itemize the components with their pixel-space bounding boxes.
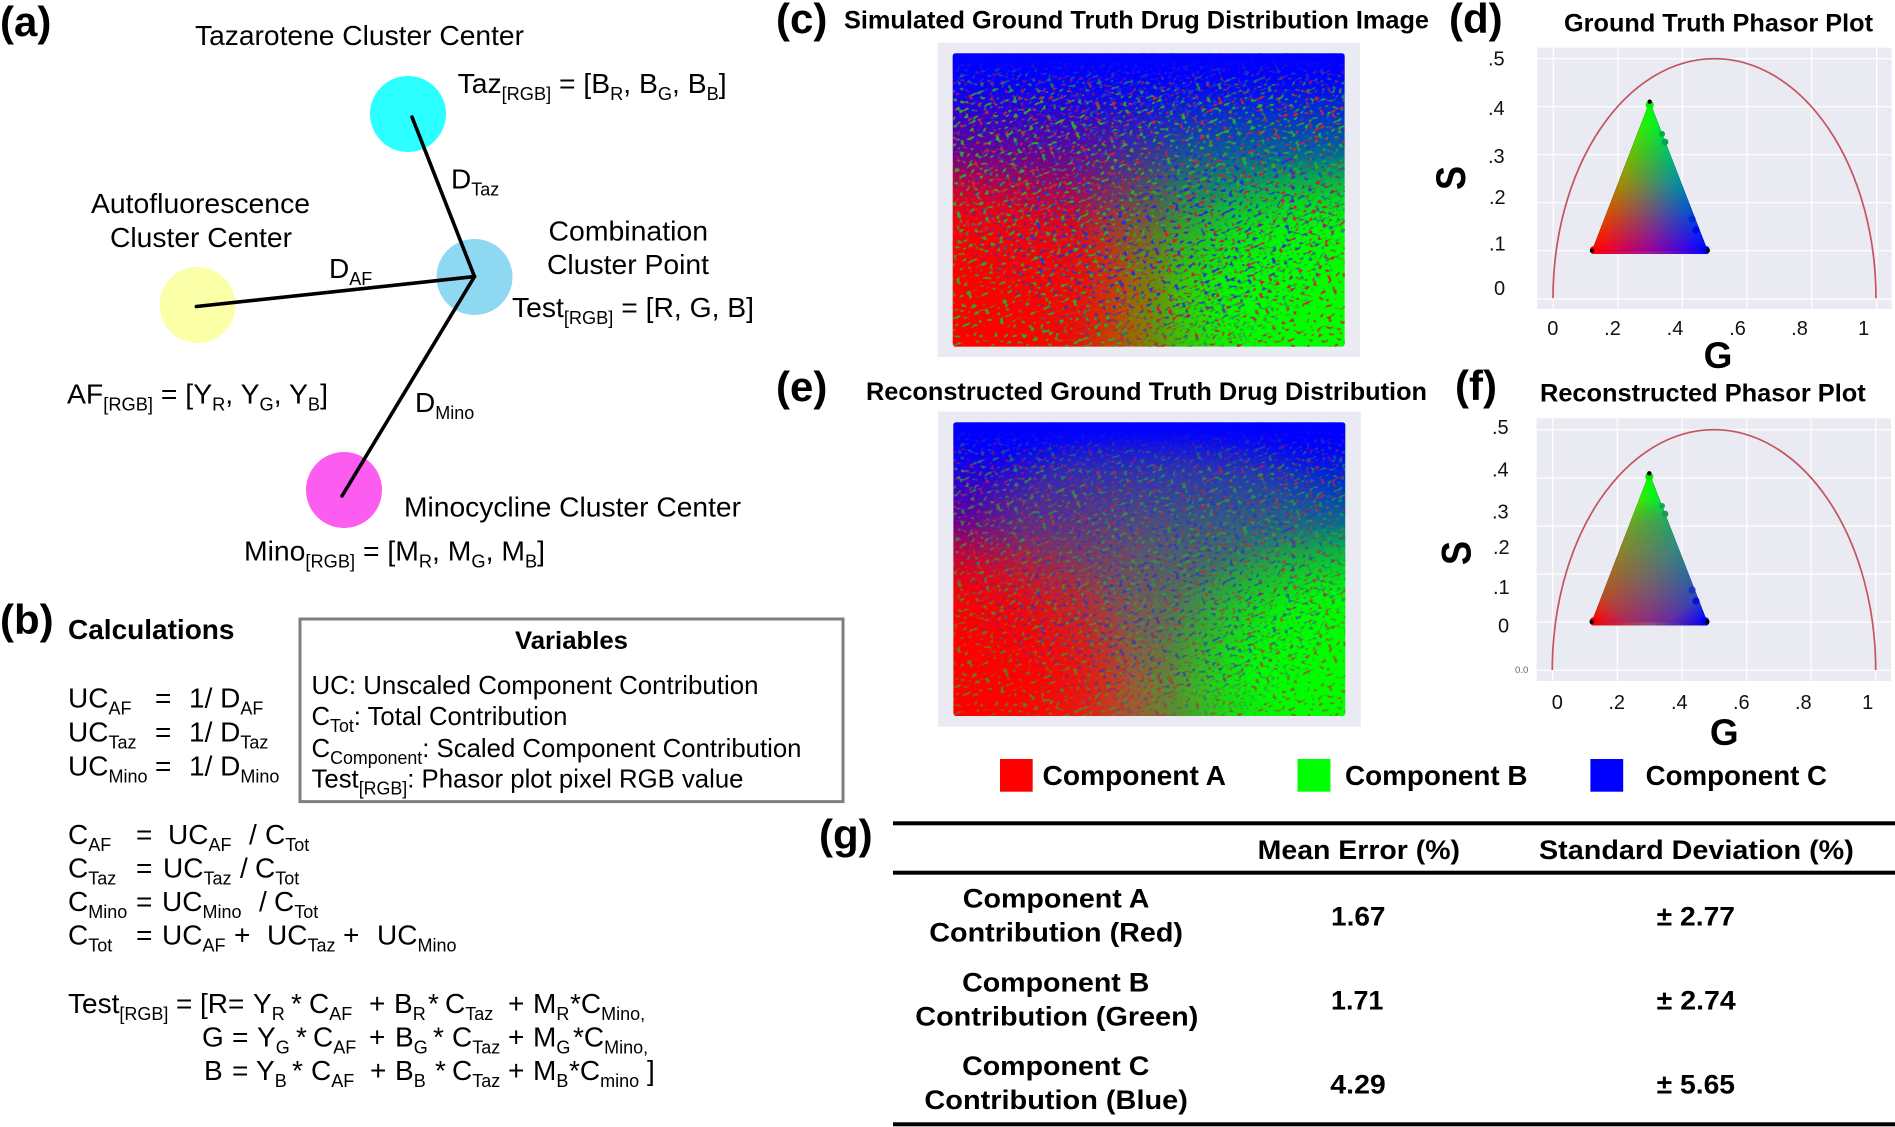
formulas: scaled contributions: UC xyxy=(162,886,202,917)
x axis ticks: .8 xyxy=(1791,318,1808,340)
formulas: scaled contributions: Taz xyxy=(203,869,231,889)
box: variables legend: C xyxy=(312,701,330,731)
label: D Mino: Mino xyxy=(435,403,474,423)
box: variables legend: : Scaled Component Contribution xyxy=(422,733,802,763)
formulas: test pixel RGB: B xyxy=(395,1022,414,1052)
y axis ticks: .1 xyxy=(1493,577,1510,599)
formulas: unscaled contributions: Mino xyxy=(108,767,147,787)
y axis title: S xyxy=(1432,541,1480,565)
y axis ticks: .5 xyxy=(1488,49,1505,71)
formulas: test pixel RGB: *C xyxy=(570,988,601,1019)
box: variables legend: Test xyxy=(312,764,359,794)
formulas: unscaled contributions: = xyxy=(155,682,171,714)
formulas: test pixel RGB: B xyxy=(394,988,413,1019)
box: variables legend: : Total Contribution xyxy=(354,701,568,731)
formula: AF RGB: R xyxy=(212,394,225,414)
chart background xyxy=(938,43,1360,357)
formulas: scaled contributions: AF xyxy=(208,835,231,855)
legend label B: Component B xyxy=(1345,760,1528,791)
formula: Mino RGB: Mino xyxy=(244,536,305,566)
formula: AF RGB: G xyxy=(260,394,274,414)
x axis ticks: .6 xyxy=(1729,318,1746,340)
formulas: test pixel RGB: B xyxy=(556,1071,568,1091)
distance lines xyxy=(196,117,474,496)
formula: Mino RGB: = [M xyxy=(355,536,419,566)
formulas: test pixel RGB: + xyxy=(508,1022,524,1052)
formulas: unscaled contributions: Mino xyxy=(240,767,279,787)
formulas: test pixel RGB: * xyxy=(292,1055,303,1086)
formulas: scaled contributions: Mino xyxy=(202,902,241,922)
formulas: scaled contributions: Mino xyxy=(417,936,456,956)
formulas: test pixel RGB: = xyxy=(232,1022,248,1052)
formulas: scaled contributions: / xyxy=(249,819,257,850)
formulas: test pixel RGB: + xyxy=(370,1055,386,1086)
y axis ticks: .2 xyxy=(1493,537,1510,559)
formulas: test pixel RGB: AF xyxy=(333,1038,356,1058)
table row: component A: Contribution (Red) xyxy=(929,918,1183,948)
y axis title: S xyxy=(1427,166,1474,190)
x axis ticks: .6 xyxy=(1733,692,1750,714)
chart background xyxy=(938,412,1361,727)
formulas: scaled contributions: / xyxy=(240,853,248,884)
table row: component C xyxy=(924,1051,1735,1115)
formulas: test pixel RGB: Taz xyxy=(465,1004,493,1024)
label: D Taz: Taz xyxy=(471,180,499,200)
formula: AF RGB: AF xyxy=(67,378,103,410)
formulas: test pixel RGB: [R= xyxy=(200,988,244,1019)
formula: Test RGB: [RGB] xyxy=(564,308,613,328)
y axis ticks xyxy=(1488,49,1506,300)
label: D Mino: D xyxy=(415,387,435,418)
chart: phasor triangle xyxy=(1591,473,1709,626)
y axis ticks: 0 xyxy=(1498,616,1509,638)
formulas: scaled contributions: C xyxy=(68,819,88,850)
formula: Taz RGB: B xyxy=(707,84,719,104)
x axis ticks xyxy=(1552,692,1873,714)
formulas: scaled contributions: + xyxy=(343,920,359,950)
label (f): (f) xyxy=(1455,362,1497,409)
y axis ticks: .3 xyxy=(1492,501,1509,523)
formula: AF RGB: , Y xyxy=(274,378,308,410)
formula: Mino RGB: B xyxy=(525,552,537,572)
formulas: test pixel RGB: Test xyxy=(68,988,120,1019)
formulas: test pixel RGB: C xyxy=(309,988,329,1019)
formulas: unscaled contributions: 1/ D xyxy=(189,682,240,714)
swatch: component A xyxy=(1000,759,1033,792)
table row: component C: Component C xyxy=(962,1051,1149,1081)
y axis ticks: .5 xyxy=(1492,417,1509,439)
formulas: scaled contributions: UC xyxy=(267,920,307,950)
label (g): (g) xyxy=(819,811,873,858)
formula: Mino RGB: , M xyxy=(486,536,525,566)
label: D Taz: D xyxy=(451,164,471,194)
heading: Combination cluster point: Cluster Point xyxy=(547,249,709,280)
y axis ticks: 0 xyxy=(1494,278,1505,300)
x axis ticks: .8 xyxy=(1795,692,1812,714)
panel (f): reconstructed phasor plot xyxy=(1432,362,1891,753)
icon: autofluorescence cluster circle xyxy=(160,267,236,343)
formulas: test pixel RGB: *C xyxy=(569,1055,600,1086)
x axis title: G xyxy=(1704,335,1732,376)
formulas: scaled contributions: AF xyxy=(88,835,111,855)
formulas: test pixel RGB: Taz xyxy=(472,1038,500,1058)
panel (a): cluster distance diagram xyxy=(0,0,754,572)
formulas: test pixel RGB: * xyxy=(433,1022,444,1052)
x axis ticks: 0 xyxy=(1552,692,1563,714)
heading: Autofluorescence cluster center: Cluster Center xyxy=(110,222,292,253)
formulas: scaled contributions: = xyxy=(136,886,152,917)
formula: AF RGB: B xyxy=(308,394,320,414)
formulas: scaled contributions: Tot xyxy=(275,869,299,889)
table header: Standard Deviation (%) xyxy=(1539,835,1854,865)
formulas: test pixel RGB: C xyxy=(313,1022,333,1052)
formulas: scaled contributions: UC xyxy=(163,853,203,884)
formulas: scaled contributions: C xyxy=(255,853,275,884)
formulas: unscaled contributions: UC xyxy=(68,682,108,714)
y axis ticks: 0.0 xyxy=(1515,665,1528,676)
formulas: scaled contributions: UC xyxy=(162,920,202,950)
formula: Mino RGB: G xyxy=(471,552,486,572)
table header xyxy=(1258,835,1854,865)
x axis title: G xyxy=(1710,712,1739,753)
formula: Taz RGB: [RGB] xyxy=(502,84,551,104)
heading: Minocycline cluster center: Minocycline Cluster Center xyxy=(404,492,741,522)
formulas: test pixel RGB: Y xyxy=(257,1022,276,1052)
formulas: test pixel RGB: AF xyxy=(329,1004,352,1024)
heading: simulated image title: Simulated Ground Truth Drug Distribution Image xyxy=(844,6,1429,34)
heading: Calculations: Calculations xyxy=(68,614,234,645)
formulas: scaled contributions: C xyxy=(68,920,88,950)
formulas: scaled contributions: Taz xyxy=(88,869,116,889)
x axis ticks: .4 xyxy=(1671,692,1688,714)
formulas: unscaled contributions xyxy=(68,682,279,787)
formulas: unscaled contributions: Taz xyxy=(108,733,136,753)
box: variables legend: [RGB] xyxy=(359,779,407,799)
formulas: test pixel RGB: G xyxy=(556,1038,570,1058)
icon: tazarotene cluster circle xyxy=(370,76,446,152)
formula: Taz RGB: , B xyxy=(623,68,658,99)
table row: component B xyxy=(915,968,1736,1032)
formulas: test pixel RGB: R xyxy=(413,1004,426,1024)
heading: Autofluorescence cluster center xyxy=(91,188,310,253)
formulas: test pixel RGB: B xyxy=(204,1055,223,1086)
formulas: test pixel RGB: *C xyxy=(573,1022,604,1052)
formulas: test pixel RGB: B xyxy=(414,1071,426,1091)
table row: component C: 4.29 xyxy=(1330,1069,1386,1099)
y axis ticks xyxy=(1492,417,1528,676)
heading: Combination cluster point: Combination xyxy=(548,216,708,247)
x axis ticks xyxy=(1547,318,1869,340)
formula: Test RGB: = [R, G, B] xyxy=(613,292,754,323)
label (b): (b) xyxy=(0,596,54,643)
table row: component A xyxy=(929,884,1735,948)
formulas: scaled contributions: = xyxy=(136,853,152,884)
box: variables legend: Variables xyxy=(515,627,628,655)
formulas: test pixel RGB: G xyxy=(276,1038,290,1058)
formulas: scaled contributions: C xyxy=(68,853,88,884)
formula: AF RGB: , Y xyxy=(225,378,260,410)
box: variables legend: : Phasor plot pixel RGB value xyxy=(407,764,744,794)
formulas: test pixel RGB: mino xyxy=(600,1071,639,1091)
formulas: scaled contributions: C xyxy=(68,886,88,917)
heading: reconstructed image title: Reconstructed Ground Truth Drug Distribution xyxy=(866,378,1427,406)
panel (g): error table xyxy=(819,811,1895,1126)
icon: combination cluster circle xyxy=(436,239,512,315)
x axis ticks: .2 xyxy=(1604,318,1621,340)
formula: Taz RGB: R xyxy=(610,84,623,104)
y axis ticks: .2 xyxy=(1489,187,1506,209)
formulas: test pixel RGB: G xyxy=(202,1022,224,1052)
formula: Mino RGB: R xyxy=(419,552,432,572)
formulas: test pixel RGB: = xyxy=(176,988,192,1019)
icon: minocycline cluster circle xyxy=(306,452,382,528)
formulas: test pixel RGB: * xyxy=(291,988,302,1019)
formulas: test pixel RGB: [RGB] xyxy=(119,1004,168,1024)
formulas: test pixel RGB: * xyxy=(296,1022,307,1052)
formulas: unscaled contributions: = xyxy=(155,751,171,782)
formulas: test pixel RGB: AF xyxy=(331,1071,354,1091)
formulas: scaled contributions: UC xyxy=(168,819,208,850)
formula: Taz RGB: Taz xyxy=(458,68,501,99)
swatch: component B xyxy=(1298,759,1330,792)
formula: Taz RGB: = [B xyxy=(551,68,610,99)
formulas: test pixel RGB: Y xyxy=(256,1055,275,1086)
formulas: scaled contributions: AF xyxy=(202,936,225,956)
formulas: scaled contributions: Taz xyxy=(307,936,335,956)
triangle edge scatter points xyxy=(1590,101,1710,254)
formulas: test pixel RGB: R xyxy=(272,1004,285,1024)
x axis ticks: 0 xyxy=(1547,318,1558,340)
box: variables legend: Component xyxy=(330,748,422,768)
formulas: scaled contributions: Tot xyxy=(294,902,318,922)
formulas: scaled contributions xyxy=(68,819,456,956)
panel (d): ground truth phasor plot xyxy=(1427,0,1892,376)
table row: component A: Component A xyxy=(963,884,1149,914)
formulas: unscaled contributions: = xyxy=(155,717,171,748)
legend label C: Component C xyxy=(1646,760,1827,791)
table row: component B: ± 2.74 xyxy=(1657,985,1736,1015)
formulas: unscaled contributions: 1/ D xyxy=(189,717,240,748)
panel (b): calculations and variables xyxy=(0,596,843,1091)
box: variables legend xyxy=(300,619,843,802)
plot area xyxy=(1537,48,1892,309)
formulas: test pixel RGB xyxy=(68,988,655,1091)
formula: AF RGB: [RGB] xyxy=(103,394,153,414)
formulas: test pixel RGB: C xyxy=(452,1055,472,1086)
formulas: scaled contributions: + xyxy=(234,920,250,950)
formulas: test pixel RGB: C xyxy=(452,1022,472,1052)
formulas: scaled contributions: = xyxy=(136,819,152,850)
panel (e): reconstructed image xyxy=(778,370,1426,726)
box: variables legend: Tot xyxy=(330,716,354,736)
formula: Test RGB: Test xyxy=(512,292,563,323)
formulas: unscaled contributions: AF xyxy=(240,698,263,718)
universal semicircle xyxy=(1552,430,1876,670)
y axis ticks: .1 xyxy=(1489,234,1506,256)
label: D AF: AF xyxy=(349,269,372,289)
heading: Autofluorescence cluster center: Autofluorescence xyxy=(91,188,310,219)
formulas: test pixel RGB: Mino, xyxy=(604,1038,648,1058)
table row: component B: 1.71 xyxy=(1331,985,1383,1015)
chart: reconstructed RGB distribution map xyxy=(953,422,1346,716)
heading: Combination cluster point xyxy=(547,216,709,280)
formulas: test pixel RGB: + xyxy=(508,1055,524,1086)
formulas: scaled contributions: Tot xyxy=(285,835,309,855)
legend label A: Component A xyxy=(1042,760,1226,791)
formulas: test pixel RGB: B xyxy=(395,1055,414,1086)
formulas: test pixel RGB: C xyxy=(311,1055,331,1086)
formulas: test pixel RGB: C xyxy=(445,988,465,1019)
formulas: unscaled contributions: 1/ D xyxy=(189,751,240,782)
formulas: unscaled contributions: AF xyxy=(108,698,131,718)
x axis ticks: 1 xyxy=(1858,318,1869,340)
formulas: scaled contributions: C xyxy=(265,819,285,850)
triangle vertices xyxy=(1590,471,1710,624)
formula: Mino RGB: ] xyxy=(537,536,545,566)
formula: AF RGB: = [Y xyxy=(153,378,212,410)
formulas: test pixel RGB: G xyxy=(414,1038,428,1058)
formula: Taz RGB: ] xyxy=(719,68,727,99)
table row: component C: Contribution (Blue) xyxy=(924,1085,1188,1115)
formulas: test pixel RGB: M xyxy=(533,1055,556,1086)
formula: Taz RGB: G xyxy=(658,84,672,104)
formulas: unscaled contributions: Taz xyxy=(240,733,268,753)
formulas: test pixel RGB: * xyxy=(435,1055,446,1086)
x axis ticks: .2 xyxy=(1608,692,1625,714)
y axis ticks: .4 xyxy=(1492,460,1509,482)
formulas: unscaled contributions: UC xyxy=(68,751,108,782)
triangle vertices xyxy=(1590,100,1710,253)
formulas: test pixel RGB: ] xyxy=(647,1055,655,1086)
label: D AF: D xyxy=(329,253,349,284)
formula: Taz RGB: , B xyxy=(672,68,707,99)
table row: component A: ± 2.77 xyxy=(1657,902,1735,932)
formulas: scaled contributions: Tot xyxy=(88,936,112,956)
formulas: test pixel RGB: B xyxy=(275,1071,287,1091)
y axis ticks: .4 xyxy=(1488,98,1505,120)
heading: Tazarotene cluster center: Tazarotene Cluster Center xyxy=(195,20,524,51)
formulas: scaled contributions: C xyxy=(274,886,294,917)
formulas: test pixel RGB: Mino, xyxy=(601,1004,645,1024)
universal semicircle xyxy=(1553,59,1876,298)
box: variables legend: C xyxy=(312,733,330,763)
panel (c): simulated ground truth image xyxy=(778,2,1428,357)
legend: components xyxy=(1000,759,1827,792)
table row: component C: ± 5.65 xyxy=(1657,1069,1735,1099)
box: variables legend: UC: Unscaled Component Contribution xyxy=(312,670,758,700)
formulas: test pixel RGB: + xyxy=(508,988,524,1019)
formula: Mino RGB: , M xyxy=(432,536,471,566)
x axis ticks: 1 xyxy=(1862,692,1873,714)
swatch: component C xyxy=(1590,759,1623,792)
formulas: test pixel RGB: Taz xyxy=(472,1071,500,1091)
formulas: test pixel RGB: M xyxy=(533,988,556,1019)
chart: RGB drug distribution map xyxy=(952,53,1345,347)
formulas: scaled contributions: = xyxy=(136,920,152,950)
formulas: test pixel RGB: Y xyxy=(253,988,272,1019)
table row: component B: Contribution (Green) xyxy=(915,1002,1198,1032)
formulas: test pixel RGB: R xyxy=(556,1004,569,1024)
chart: phasor triangle xyxy=(1591,102,1709,254)
table header: Mean Error (%) xyxy=(1258,835,1460,865)
formulas: test pixel RGB: * xyxy=(428,988,439,1019)
x axis ticks: .4 xyxy=(1667,318,1683,340)
heading: reconstructed phasor title: Reconstructed Phasor Plot xyxy=(1540,380,1866,408)
formulas: test pixel RGB: = xyxy=(232,1055,248,1086)
formulas: unscaled contributions: UC xyxy=(68,717,108,748)
formulas: scaled contributions: / xyxy=(259,886,267,917)
label (e): (e) xyxy=(776,363,827,410)
plot area xyxy=(1537,418,1891,681)
formulas: test pixel RGB: + xyxy=(369,988,385,1019)
heading: ground truth phasor title: Ground Truth Phasor Plot xyxy=(1564,10,1874,38)
triangle edge scatter points xyxy=(1590,472,1709,625)
formulas: scaled contributions: Mino xyxy=(88,902,127,922)
y axis ticks: .3 xyxy=(1488,146,1505,168)
table row: component B: Component B xyxy=(962,968,1149,998)
formula: AF RGB: ] xyxy=(320,378,328,410)
table row: component A: 1.67 xyxy=(1331,902,1386,932)
formulas: scaled contributions: UC xyxy=(377,920,417,950)
formula: Mino RGB: [RGB] xyxy=(305,552,355,572)
formulas: test pixel RGB: M xyxy=(533,1022,556,1052)
formulas: test pixel RGB: + xyxy=(369,1022,385,1052)
